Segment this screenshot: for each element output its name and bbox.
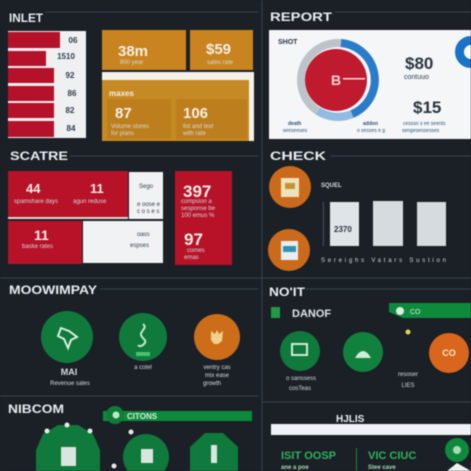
white band	[102, 72, 254, 80]
green labels: ane a poe	[281, 465, 309, 471]
white strip	[8, 217, 128, 219]
yellow dot	[406, 330, 410, 334]
green divider	[356, 448, 357, 471]
panel: report donut	[269, 10, 471, 139]
scatter text: oass	[137, 232, 150, 238]
white block top	[129, 172, 163, 219]
scatter text: e oose e	[137, 202, 161, 208]
scatter text: emas	[184, 255, 199, 261]
captions: cosTeas	[289, 386, 311, 392]
icon: orange badge one	[269, 166, 311, 208]
bar chart: 2370	[334, 225, 352, 234]
captions: ventry cas	[203, 365, 231, 371]
table background	[8, 31, 86, 138]
green banner: CITONS	[127, 412, 158, 421]
card: top right	[190, 30, 253, 70]
legend text	[283, 121, 446, 134]
scatter text: 397	[183, 182, 211, 201]
captions: a cotel	[134, 365, 152, 371]
red bars	[8, 32, 60, 137]
row values: 92	[66, 71, 75, 80]
heading: moonpay: MOOWIMPAY	[9, 283, 97, 297]
scatter text: c o s e s	[137, 209, 159, 215]
row values: 06	[69, 36, 78, 45]
scatter text: 11	[34, 227, 49, 243]
captions: MAI	[61, 367, 77, 377]
row values: 86	[68, 89, 77, 98]
captions	[286, 372, 418, 392]
captions: resoser	[398, 372, 418, 378]
orange card text	[109, 41, 234, 137]
green labels: VIC CIUC	[368, 450, 416, 462]
row values: 82	[66, 106, 75, 115]
scatter text: Sego	[139, 184, 154, 190]
legend text: wreseeues	[283, 128, 308, 134]
scatter text: 44	[26, 181, 41, 196]
orange card text: 87	[115, 105, 132, 122]
inner card right	[176, 99, 247, 139]
icon: green octagon document	[36, 425, 100, 471]
row values: 84	[67, 124, 76, 133]
orange card text: Volume stores	[111, 124, 149, 130]
icon: green people	[280, 331, 320, 371]
captions	[50, 365, 231, 387]
value: 15 dollars: $15	[413, 98, 441, 117]
scatter text: 100 emus %	[181, 213, 215, 219]
green labels	[281, 450, 416, 471]
panel: top left red table	[8, 11, 86, 138]
orange card text: sales rate	[207, 60, 234, 66]
icon: orange hand	[194, 314, 240, 360]
scatter text	[14, 181, 216, 261]
legend text: death	[288, 121, 301, 127]
panel: scatter red blocks	[8, 149, 232, 265]
scatter text: agun reduse	[73, 199, 107, 205]
panel: moonpay circles	[9, 283, 240, 387]
green labels: Stee cave	[368, 465, 396, 471]
panel: note and danger	[269, 285, 471, 392]
card label: SHOT	[278, 39, 298, 46]
icon: green leaf	[119, 313, 167, 361]
heading: check: CHECK	[270, 149, 326, 163]
donut chart: B	[331, 72, 341, 88]
connector dots	[44, 422, 134, 468]
chart caption: Sereighs Vatars Sustion	[321, 258, 446, 264]
icon: green tag	[271, 307, 280, 318]
icon: green star	[41, 311, 93, 363]
row values	[57, 36, 78, 133]
scatter text: sesponse be	[181, 206, 216, 212]
red block lower	[8, 221, 82, 264]
icon: blue ring	[460, 40, 471, 64]
green banner	[103, 406, 252, 424]
heading: scatter: SCATRE	[10, 149, 68, 163]
captions: mix ease	[205, 373, 230, 379]
right white edge	[249, 80, 254, 141]
green banner	[389, 303, 471, 318]
inner card left	[107, 99, 171, 139]
scatter text: espses	[130, 243, 149, 249]
captions: LIES	[401, 383, 415, 389]
legend text: cesssn s ee seents	[403, 121, 446, 127]
orange card text: list and text	[183, 124, 214, 130]
orange card text: 106	[183, 105, 208, 122]
heading: nibcom: NIBCOM	[8, 402, 64, 416]
bar chart	[323, 201, 446, 246]
captions: growth	[203, 381, 221, 387]
white block lower	[83, 221, 163, 263]
white bar	[271, 424, 471, 435]
orange card text: with rate	[182, 131, 206, 137]
captions: o sanssess	[286, 376, 316, 382]
orange card text: 800 year	[120, 60, 143, 66]
icon: green person	[445, 438, 471, 471]
icon: green octagon tower	[190, 433, 238, 471]
scatter text: baske rates	[22, 244, 53, 250]
row values: 1510	[57, 52, 75, 61]
panel: bottom right	[271, 414, 471, 471]
heading: danger: DANOF	[292, 308, 331, 320]
white card	[269, 30, 471, 139]
icon: green group	[343, 332, 383, 372]
orange card text: for plans	[111, 131, 134, 137]
orange card text: maxes	[109, 89, 134, 98]
scatter text: 97	[184, 230, 203, 249]
donut chart	[301, 43, 375, 117]
red block top	[8, 171, 128, 217]
orange card text: 38m	[118, 43, 148, 60]
card: lower container	[102, 80, 249, 141]
heading: note: NO'IT	[269, 285, 306, 299]
label: quiet: SQUEL	[321, 183, 342, 189]
panel: orange metric cards	[102, 30, 254, 141]
heading: hijlis: HJLIS	[336, 414, 365, 425]
icon: orange badge two	[268, 229, 310, 271]
panel: nibcom	[8, 402, 252, 471]
icon: orange badge	[429, 333, 469, 373]
scatter text: spamshare days	[14, 199, 58, 205]
captions: Revenue sales	[50, 381, 90, 387]
scatter text: comes	[187, 248, 205, 254]
green banner: CO	[410, 309, 421, 316]
scatter text: 11	[90, 181, 104, 196]
card: top left	[102, 30, 186, 70]
legend text: addon	[363, 121, 378, 127]
orange card text: $59	[206, 41, 231, 58]
caption: value one: contuuo	[404, 74, 429, 81]
icon: green octagon files	[123, 434, 169, 471]
value: 80 dollars: $80	[405, 54, 433, 73]
scatter text: compsion a	[181, 199, 212, 205]
icon: orange badge: CO	[442, 348, 456, 358]
legend text: sengeseosesses	[402, 128, 440, 134]
legend text: o sesses e g	[357, 128, 385, 134]
heading: report: REPORT	[270, 10, 333, 24]
heading: inlet: INLET	[9, 11, 44, 25]
red column	[175, 171, 232, 265]
panel: check bars	[268, 149, 446, 271]
green labels: ISIT OOSP	[281, 450, 336, 462]
